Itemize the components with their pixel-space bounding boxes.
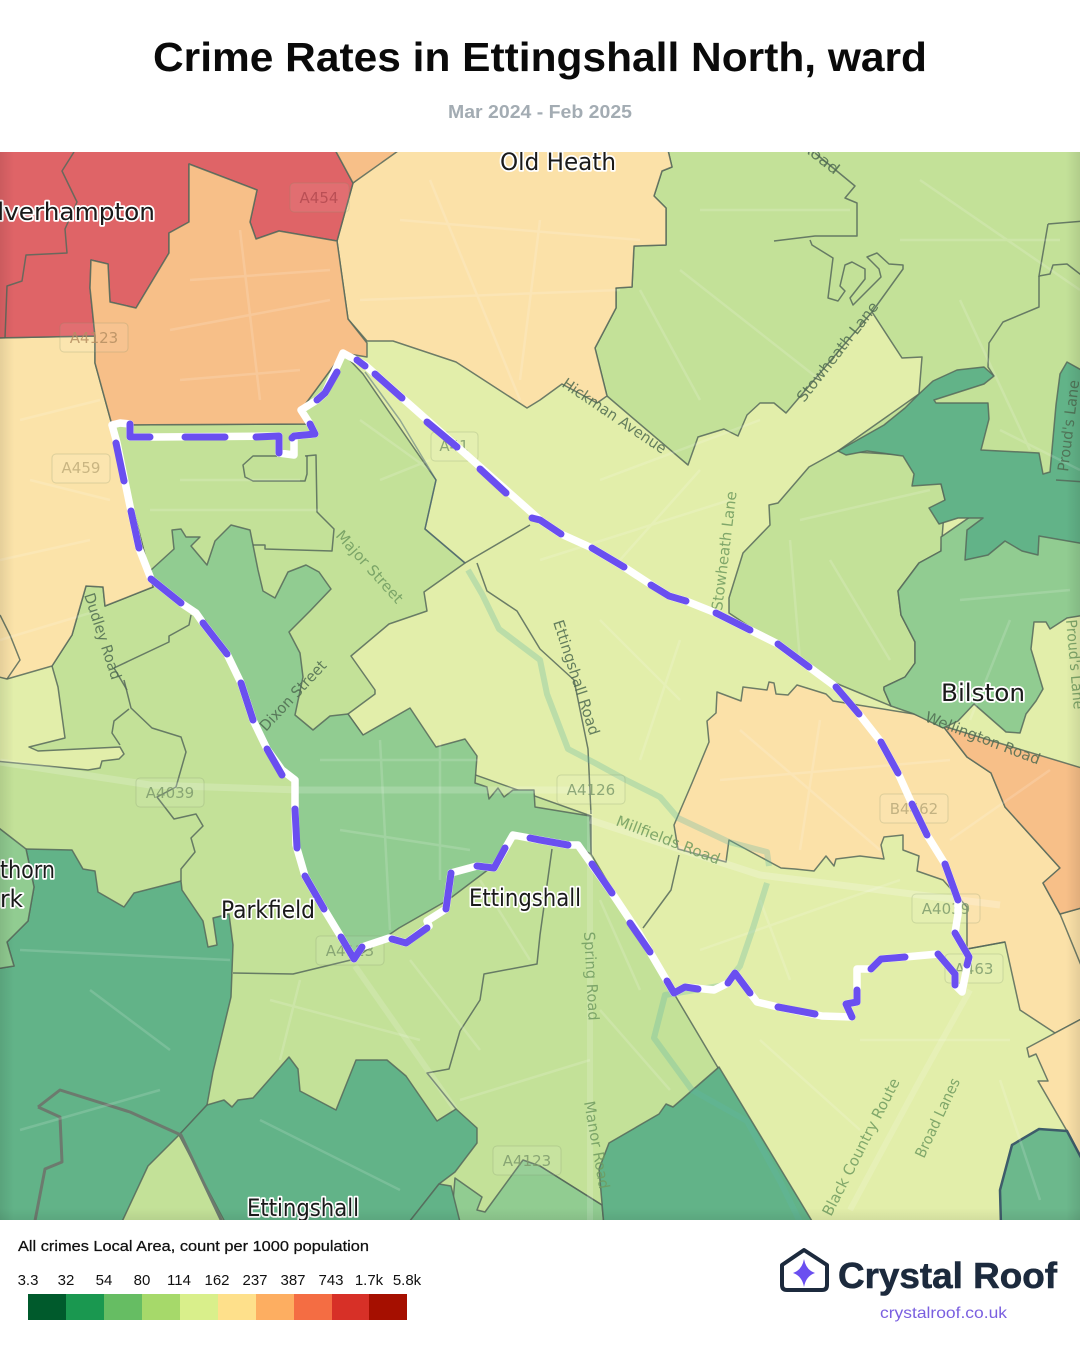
shield: A4123 south <box>493 1146 561 1175</box>
legend values: 54 <box>96 1272 112 1289</box>
road label: Black Country Route: Black Country Route <box>819 1075 904 1219</box>
road label: Stowheath Lane north: Stowheath Lane <box>793 298 882 405</box>
area: southeast yellow <box>674 682 1080 1033</box>
shield: A4123 north: A4123 <box>70 329 118 347</box>
subtitle: date range: Mar 2024 - Feb 2025 <box>448 102 632 122</box>
wordmark: Crystal Roof <box>838 1255 1058 1296</box>
road labels <box>80 137 1080 1219</box>
shield: A4039 east <box>912 894 980 923</box>
area: southwest dark green <box>0 849 233 1226</box>
shield: A41 <box>431 432 478 461</box>
road label: Road north: Road <box>798 137 843 178</box>
shield: A4126 <box>557 775 625 804</box>
area: Bilston green <box>884 510 1080 733</box>
area: south dark green wedge <box>410 1183 460 1220</box>
road label: Manor Road: Manor Road <box>580 1100 613 1190</box>
legend values: 1.7k <box>355 1272 384 1289</box>
legend values: 162 <box>204 1272 230 1289</box>
place: Old Heath: Old Heath <box>500 148 616 176</box>
area: bottom-right green <box>1000 1129 1080 1226</box>
legend values: 80 <box>134 1272 150 1289</box>
road label: Wellington Road: Wellington Road <box>923 708 1043 768</box>
map edge shading <box>0 152 1080 1220</box>
road label: Dudley Road: Dudley Road <box>80 591 125 682</box>
shield: A4123 south: A4123 <box>503 1152 551 1170</box>
area: Old Heath yellow <box>337 146 672 408</box>
road label: Stowheath Lane south: Stowheath Lane <box>708 490 741 611</box>
legend values: 114 <box>167 1272 191 1289</box>
legend values: 237 <box>242 1272 268 1289</box>
area: west yellow <box>0 336 153 679</box>
shield: A454: A454 <box>300 189 338 207</box>
place: Ettingshall north: Ettingshall <box>469 884 581 912</box>
area: central green <box>151 525 591 958</box>
shield: A4126: A4126 <box>567 781 615 799</box>
internal boundaries <box>0 152 1080 1226</box>
icon: crystal roof house <box>782 1250 827 1290</box>
road label: Millfields Road: Millfields Road <box>614 812 723 868</box>
shield: B4462: B4462 <box>890 800 938 818</box>
river line <box>365 372 465 563</box>
legend colour scale <box>28 1294 407 1320</box>
legend values <box>18 1272 422 1289</box>
road label: Major Street: Major Street <box>332 527 407 607</box>
ward outline: blue dashes <box>116 360 969 1017</box>
website: crystalroof.co.uk <box>880 1305 1008 1322</box>
legend title: All crimes Local Area, count per 1000 population <box>18 1239 369 1255</box>
area: Proud's Lane dark green <box>838 362 1080 560</box>
shield: A41: A41 <box>439 437 469 455</box>
area: south dark green <box>179 1057 477 1226</box>
shield: A4123 north <box>60 323 128 352</box>
road label: Spring Road: Spring Road <box>580 931 603 1021</box>
shield: A4123 mid: A4123 <box>326 942 374 960</box>
legend values: 5.8k <box>393 1272 422 1289</box>
place: Bilston: Bilston <box>941 679 1025 707</box>
legend values: 743 <box>318 1272 344 1289</box>
road label: Ettingshall Road: Ettingshall Road <box>549 618 603 737</box>
area: south small green <box>451 1160 604 1226</box>
area: southwest pocket green <box>0 825 34 969</box>
shield: A4039 east: A4039 <box>922 900 970 918</box>
legend values: 3.3 <box>18 1272 38 1289</box>
road label: Broad Lanes: Broad Lanes <box>911 1075 964 1161</box>
shield: A459: A459 <box>62 459 100 477</box>
place labels <box>0 148 1025 1222</box>
place: rk fragment: rk <box>0 885 23 913</box>
area: Wellington Road orange <box>943 726 1080 914</box>
place: Ettingshall south: Ettingshall <box>247 1194 359 1222</box>
area: top orange wedge <box>336 152 398 184</box>
title: Crime Rates in Ettingshall North, ward <box>153 34 927 80</box>
road shields <box>52 183 1003 1175</box>
area: base low-crime zone <box>0 312 1080 1220</box>
shield: A4039: A4039 <box>146 784 194 802</box>
road label: Dixon Street: Dixon Street <box>256 657 330 735</box>
area: east mid-green block <box>729 451 945 706</box>
legend values: 32 <box>58 1272 74 1289</box>
shield: A459 <box>52 454 110 483</box>
area: southeast dark green <box>599 1067 815 1226</box>
area: southwest mid-green <box>0 358 718 1220</box>
ward outline: white casing <box>112 353 969 1017</box>
area: far southeast yellow <box>1027 1017 1080 1165</box>
area: Wolverhampton red <box>0 146 353 338</box>
roads <box>0 180 1080 1220</box>
shield: A454 <box>290 183 349 212</box>
logo <box>782 1250 1058 1322</box>
shield: A4039 <box>136 778 204 807</box>
shield: A463: A463 <box>955 960 993 978</box>
shield: A463 <box>945 954 1003 983</box>
legend <box>18 1239 422 1320</box>
place: Parkfield: Parkfield <box>221 896 315 924</box>
area: central-west orange <box>90 164 367 425</box>
canal <box>468 570 802 1226</box>
shield: B4462 <box>880 794 948 823</box>
area: northeast mid-green <box>595 152 1080 473</box>
shield: A4123 mid <box>316 936 384 965</box>
place: thorn fragment: thorn <box>0 856 55 884</box>
road label: Hickman Avenue: Hickman Avenue <box>559 374 670 458</box>
legend values: 387 <box>280 1272 306 1289</box>
